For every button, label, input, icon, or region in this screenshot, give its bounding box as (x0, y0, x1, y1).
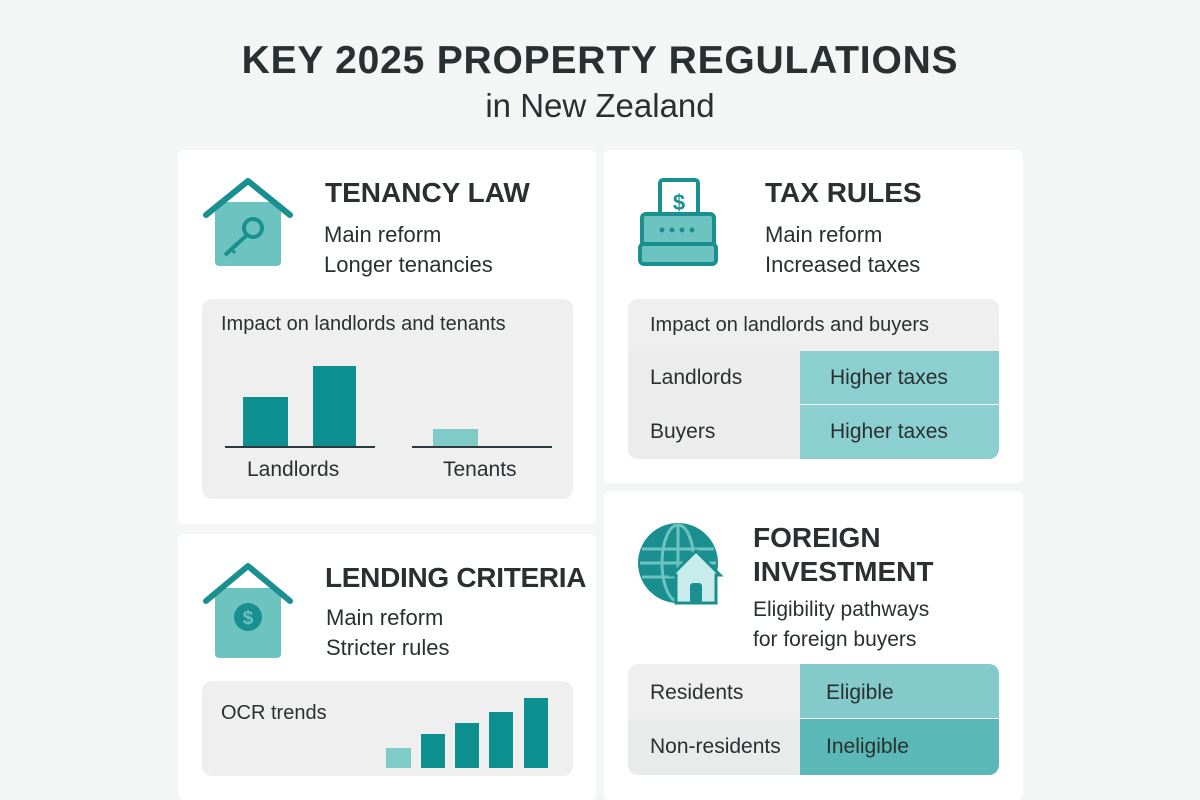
panel: foreign investment (604, 491, 1023, 800)
bar chart: Tenants (443, 458, 517, 481)
heading: INVESTMENT (753, 556, 933, 587)
table: impact: Impact on landlords and buyers (650, 314, 929, 336)
panel: tenancy law (178, 150, 596, 524)
table: impact (628, 299, 999, 459)
bar chart: Impact on landlords and tenants (221, 313, 506, 335)
table: eligibility: Ineligible (826, 735, 909, 758)
table: impact: Higher taxes (830, 366, 948, 389)
title: in New Zealand (485, 87, 715, 124)
bar chart: OCR trends: OCR trends (221, 702, 327, 724)
bar chart: Landlords (247, 458, 339, 481)
text block (326, 605, 449, 660)
text block: Main reform (765, 222, 882, 247)
heading: TENANCY LAW (325, 177, 530, 208)
table: eligibility: Eligible (826, 681, 894, 704)
icon: cash register: $ (673, 190, 685, 215)
text block: Stricter rules (326, 635, 449, 660)
bar chart (202, 299, 573, 499)
bar chart: OCR trends (202, 681, 573, 776)
icon: house with key (203, 178, 293, 266)
icon: house with dollar: $ (243, 608, 254, 629)
heading: LENDING CRITERIA (325, 562, 586, 593)
panel: tax rules (604, 150, 1023, 483)
text block: Main reform (324, 222, 441, 247)
table: eligibility (628, 664, 999, 775)
text block (753, 598, 929, 651)
icon: cash register (638, 178, 718, 266)
table: eligibility: Non-residents (650, 735, 781, 758)
heading: FOREIGN (753, 522, 881, 553)
text block (324, 222, 493, 277)
icon: globe with house (638, 523, 724, 604)
heading (753, 522, 934, 587)
text block (765, 222, 920, 277)
table: impact: Landlords (650, 366, 742, 389)
text block: Longer tenancies (324, 252, 493, 277)
text block: Eligibility pathways (753, 598, 929, 621)
heading: TAX RULES (765, 177, 922, 208)
text block: Main reform (326, 605, 443, 630)
title (242, 39, 958, 124)
table: impact: Buyers (650, 420, 715, 443)
table: impact: Higher taxes (830, 420, 948, 443)
table: eligibility: Residents (650, 681, 743, 704)
text block: Increased taxes (765, 252, 920, 277)
title: KEY 2025 PROPERTY REGULATIONS (242, 39, 958, 82)
panel: lending criteria (178, 534, 596, 800)
text block: for foreign buyers (753, 628, 916, 651)
icon: house with dollar (203, 562, 293, 658)
